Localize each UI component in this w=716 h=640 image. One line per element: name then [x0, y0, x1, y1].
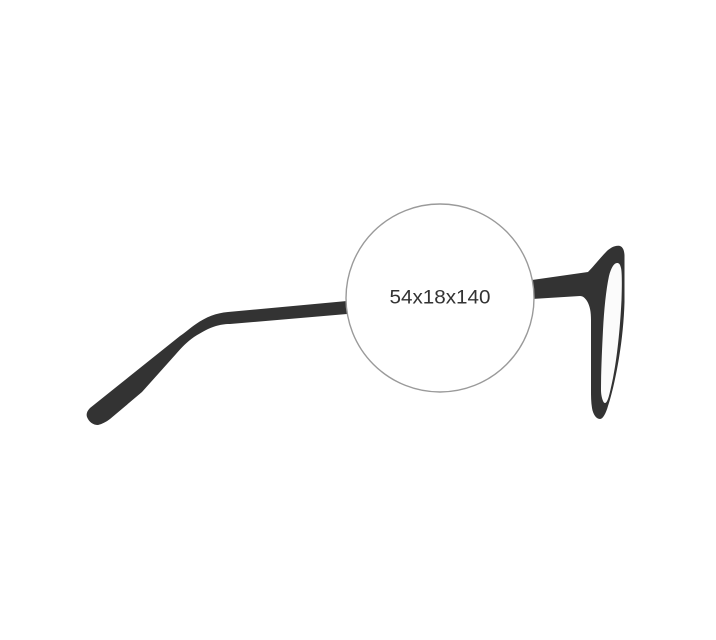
circle outline [346, 204, 534, 392]
temple arm [87, 301, 347, 425]
size label: 54x18x140 [390, 286, 491, 308]
front frame [532, 246, 624, 419]
measurement callout circle [346, 204, 534, 392]
lens [601, 263, 622, 403]
glasses side profile [87, 246, 624, 425]
